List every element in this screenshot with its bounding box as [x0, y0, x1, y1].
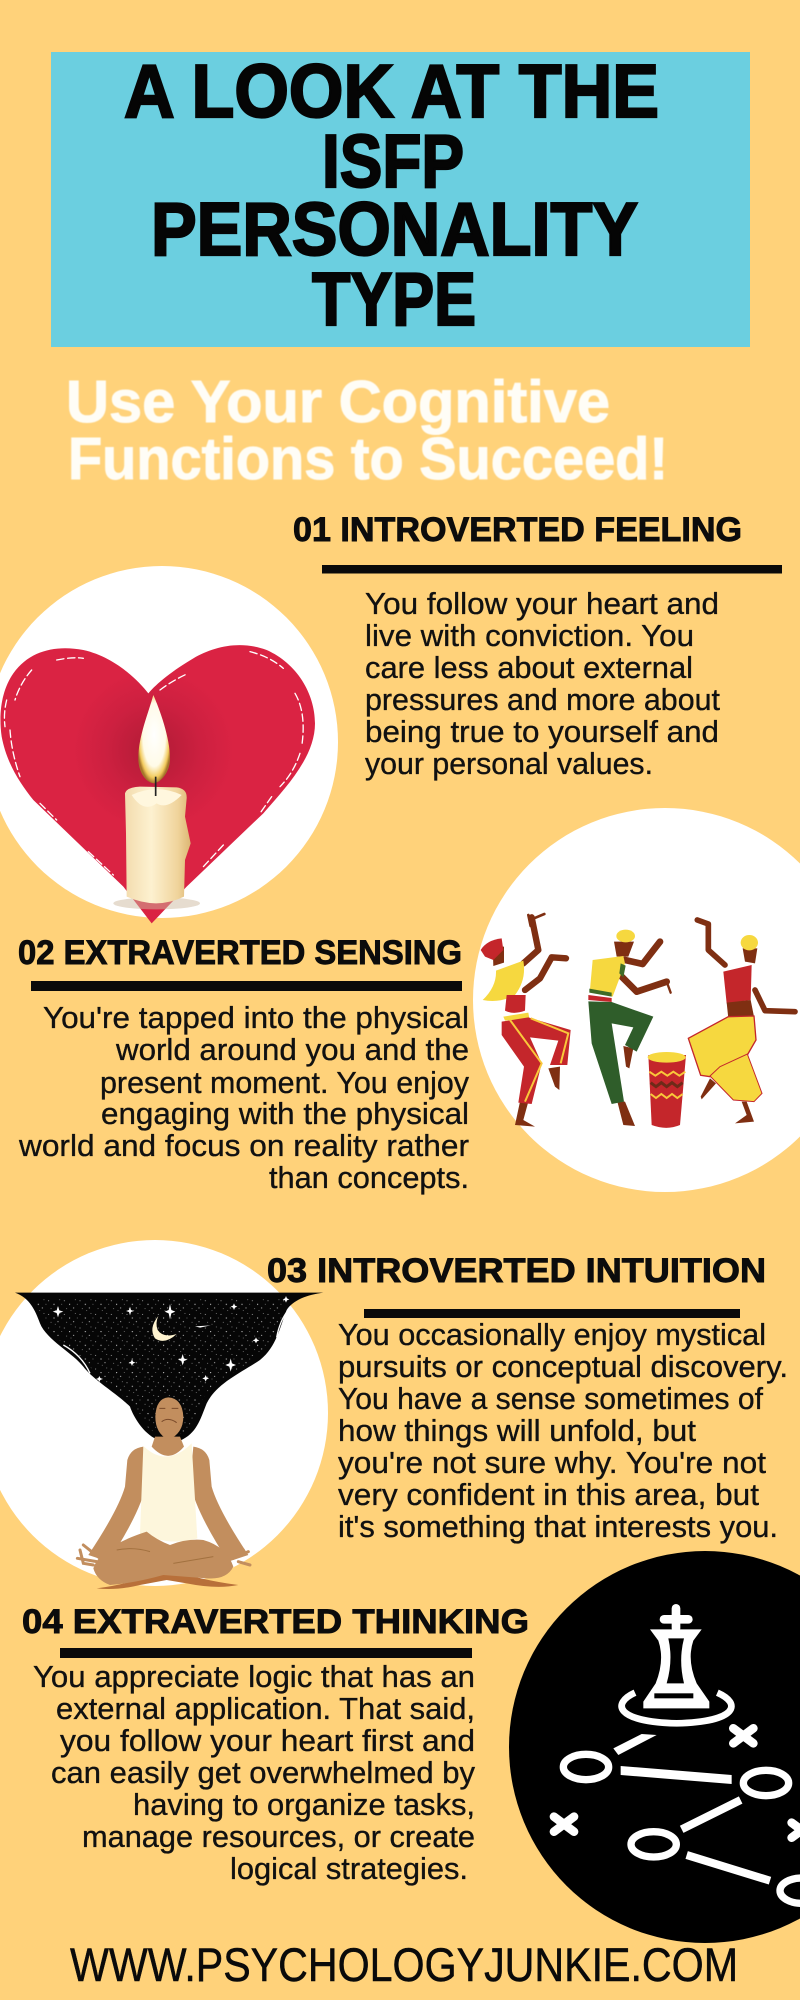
body text 04: external application. That said, [56, 1691, 475, 1726]
heading 03: 03 INTROVERTED INTUITION [267, 1252, 766, 1290]
subtitle [66, 369, 668, 492]
body text 01: pressures and more about [365, 682, 720, 717]
drum [648, 1052, 686, 1128]
body text 03: you're not sure why. You're not [338, 1445, 766, 1480]
icon: chess king strategy [509, 1551, 800, 1943]
panel: 03 introverted intuition [0, 1240, 788, 1589]
subtitle: Functions to Succeed! [68, 426, 668, 492]
icon: heart and candle [0, 566, 338, 923]
icon: dancers and drum [473, 808, 800, 1192]
body text 04 [33, 1659, 475, 1886]
title: PERSONALITY [151, 187, 638, 271]
body text 02: present moment. You enjoy [100, 1065, 469, 1100]
body text 03: pursuits or conceptual discovery. [338, 1349, 788, 1384]
body text 04: can easily get overwhelmed by [51, 1755, 475, 1790]
body text 03: You occasionally enjoy mystical [338, 1317, 766, 1352]
body text 02: than concepts. [269, 1160, 469, 1195]
body text 01: being true to yourself and [365, 714, 719, 749]
heading 04: 04 EXTRAVERTED THINKING [22, 1603, 529, 1641]
body text 01: You follow your heart and [365, 586, 719, 621]
body text 04: you follow your heart first and [60, 1723, 475, 1758]
body text 04: You appreciate logic that has an [33, 1659, 475, 1694]
dancer left [481, 914, 571, 1127]
heading 02: 02 EXTRAVERTED SENSING [18, 934, 462, 972]
body text 01 [365, 586, 720, 781]
body text 03: You have a sense sometimes of [338, 1381, 763, 1416]
body text 04: having to organize tasks, [133, 1787, 475, 1822]
body text 01: live with conviction. You [365, 618, 694, 653]
heading 01: 01 INTROVERTED FEELING [293, 511, 742, 549]
body text 02 [18, 1000, 469, 1195]
panel: 01 introverted feeling [0, 511, 782, 923]
subtitle: Use Your Cognitive [66, 369, 610, 435]
title banner [51, 49, 750, 347]
body text 01: your personal values. [365, 746, 653, 781]
title: A LOOK AT THE [124, 49, 659, 133]
dancer right [688, 920, 795, 1123]
body text 04: manage resources, or create [82, 1819, 475, 1854]
body text 03 [338, 1317, 788, 1544]
body text 02: world and focus on reality rather [18, 1128, 469, 1163]
body text 04: logical strategies. [230, 1851, 468, 1886]
body text 03: how things will unfold, but [338, 1413, 696, 1448]
title: TYPE [312, 257, 476, 341]
dancer centre [588, 930, 671, 1126]
panel: 04 extraverted thinking [22, 1551, 800, 1943]
body text 03: it's something that interests you. [338, 1509, 778, 1544]
title [124, 49, 659, 341]
body text 02: engaging with the physical [101, 1096, 469, 1131]
body text 02: world around you and the [115, 1032, 469, 1067]
body text 02: You're tapped into the physical [43, 1000, 469, 1035]
body text 03: very confident in this area, but [338, 1477, 759, 1512]
title: ISFP [322, 119, 464, 203]
panel: 02 extraverted sensing [18, 808, 800, 1195]
body text 01: care less about external [365, 650, 693, 685]
icon: meditating woman with starry hair [0, 1240, 328, 1589]
